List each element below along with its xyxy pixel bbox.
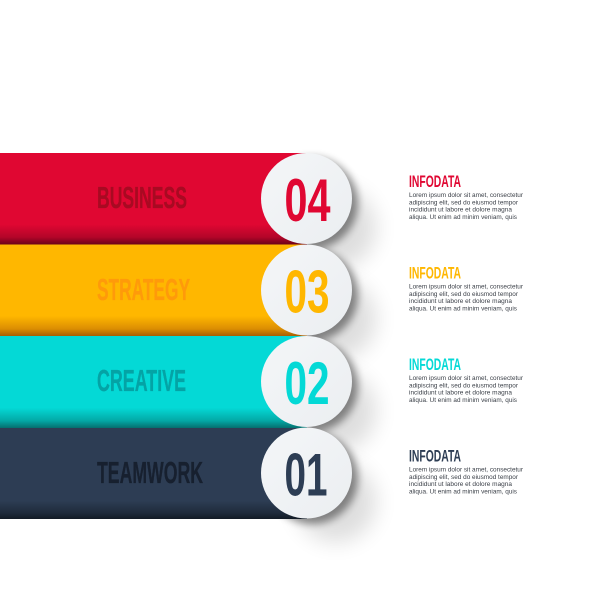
text block: infodata 04: aliqua. Ut enim ad minim veniam, quis <box>409 214 518 221</box>
band fill <box>0 153 307 244</box>
text block: infodata 01: adipiscing elit, sed do eiusmod tempor <box>409 474 519 481</box>
text block: infodata 01: aliqua. Ut enim ad minim veniam, quis <box>409 488 518 496</box>
text block: infodata 01: incididunt ut labore et dolore magna <box>409 481 512 488</box>
text block: infodata 03: adipiscing elit, sed do eiusmod tempor <box>409 291 519 298</box>
band fill <box>0 336 307 428</box>
text block: infodata 01 <box>409 446 524 496</box>
label: business: BUSINESS <box>97 180 187 215</box>
circle cast shadows <box>266 157 376 542</box>
text block: infodata 03 <box>409 264 524 312</box>
text block: infodata 02 <box>409 355 524 404</box>
band fill <box>0 428 307 519</box>
badge 04: 04 <box>284 167 331 234</box>
text block: infodata 03: aliqua. Ut enim ad minim veniam, quis <box>409 306 518 312</box>
text block: infodata 03: Lorem ipsum dolor sit amet, consectetur <box>409 284 524 290</box>
badge 04 <box>261 153 352 244</box>
band: business 04 <box>0 153 307 244</box>
text block: infodata 02: aliqua. Ut enim ad minim veniam, quis <box>409 397 518 404</box>
text block: infodata 02: Lorem ipsum dolor sit amet, consectetur <box>409 375 524 382</box>
text block: infodata 02: incididunt ut labore et dolore magna <box>409 390 512 397</box>
band fill <box>0 244 307 336</box>
label: creative: CREATIVE <box>97 363 186 398</box>
label: strategy: STRATEGY <box>97 272 190 307</box>
text block: infodata 04: incididunt ut labore et dolore magna <box>409 207 512 214</box>
text block: infodata 03: INFODATA <box>409 264 461 282</box>
text block: infodata 04: Lorem ipsum dolor sit amet, consectetur <box>409 192 524 199</box>
text block: infodata 03: incididunt ut labore et dolore magna <box>409 298 512 305</box>
text block: infodata 04: INFODATA <box>409 172 461 191</box>
label: teamwork: TEAMWORK <box>97 455 203 490</box>
badge 03 <box>261 244 352 336</box>
badge 02: 02 <box>284 350 330 417</box>
band: strategy 03 <box>0 244 307 336</box>
text block: infodata 04: adipiscing elit, sed do eiusmod tempor <box>409 199 519 206</box>
text block: infodata 04 <box>409 172 524 221</box>
badge 03: 03 <box>284 258 330 326</box>
badge 01: 01 <box>284 442 328 508</box>
text block: infodata 01: INFODATA <box>409 446 461 466</box>
band: teamwork 01 <box>0 428 307 519</box>
badge 01 <box>261 428 352 518</box>
text block: infodata 01: Lorem ipsum dolor sit amet, consectetur <box>409 466 524 474</box>
text block: infodata 02: INFODATA <box>409 355 461 374</box>
band: creative 02 <box>0 336 307 428</box>
badge 02 <box>261 336 352 427</box>
text block: infodata 02: adipiscing elit, sed do eiusmod tempor <box>409 382 519 389</box>
